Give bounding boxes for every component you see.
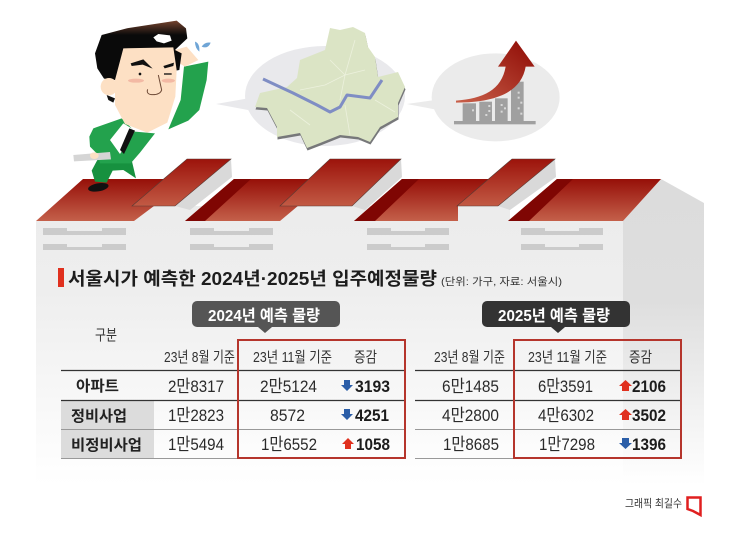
raised dormer roofs (132, 159, 555, 206)
legs (92, 160, 136, 183)
building illustration (36, 159, 704, 485)
row: redevelopment (71, 406, 389, 425)
credit (625, 497, 700, 515)
header 2025 pill: 2025년 예측 물량 (498, 307, 610, 325)
Han river (263, 79, 382, 112)
speech bubble: rising buildings (407, 41, 560, 141)
table: 2025 forecast (415, 301, 681, 458)
column headings: 23년 8월 기준 (434, 349, 505, 366)
row: non-redevelopment: 1058 (356, 435, 390, 454)
title marker (58, 268, 64, 287)
hair back (95, 21, 187, 80)
sweat drops (195, 42, 211, 52)
column headings (434, 349, 652, 366)
header 2024 pill: 2024년 예측 물량 (208, 307, 320, 325)
row label shading (61, 400, 154, 458)
icon: credit mark (688, 498, 700, 515)
highlight box 2024 (238, 340, 405, 458)
roof sections (36, 179, 661, 221)
map district lines (290, 40, 395, 135)
row: non-redevelopment: 비정비사업 (71, 437, 142, 454)
row: redevelopment: 8572 (270, 406, 305, 425)
face (115, 47, 177, 133)
building icons (454, 82, 536, 124)
building side wall (623, 179, 704, 485)
row: redevelopment: 3502 (632, 406, 666, 425)
header 2025 pill (482, 301, 630, 333)
ear (101, 78, 117, 95)
category heading: 구분 (95, 327, 117, 344)
title (58, 268, 562, 289)
map of Seoul (255, 27, 405, 148)
row: non-redevelopment: 1만7298 (539, 435, 595, 454)
row: apartments: 2106 (632, 377, 666, 396)
row: non-redevelopment: 1만5494 (168, 435, 224, 454)
row: apartments: 아파트 (76, 378, 119, 395)
raised arm (168, 62, 208, 129)
row: redevelopment: 정비사업 (71, 408, 127, 425)
credit: 그래픽 최길수 (625, 497, 682, 510)
row: redevelopment: 4만6302 (538, 406, 594, 425)
column headings: 증감 (354, 349, 377, 366)
row: redevelopment (442, 406, 666, 425)
row: redevelopment: 4251 (355, 406, 389, 425)
column headings: 23년 8월 기준 (164, 349, 235, 366)
shirt and tie (110, 123, 135, 154)
row: apartments: 3193 (355, 377, 390, 396)
row: non-redevelopment (71, 435, 390, 454)
shoe (87, 182, 109, 193)
column headings (164, 349, 377, 366)
blush (128, 79, 144, 83)
speech bubble: Seoul map (216, 27, 406, 150)
row: non-redevelopment: 1396 (632, 435, 666, 454)
nose (147, 75, 162, 95)
column headings: 증감 (629, 349, 652, 366)
window bars (43, 228, 603, 250)
title text: 서울시가 예측한 2024년·2025년 입주예정물량 (68, 269, 437, 289)
row: non-redevelopment (443, 435, 666, 454)
row: apartments: 2만5124 (260, 377, 317, 396)
rising arrow (456, 41, 535, 103)
jacket (89, 118, 155, 163)
row: non-redevelopment: 1만6552 (261, 435, 317, 454)
row: apartments: 2만8317 (168, 377, 224, 396)
row: apartments: 6만1485 (442, 377, 499, 396)
row: redevelopment: 1만2823 (168, 406, 224, 425)
rolled paper (73, 152, 111, 161)
character: man looking out (73, 21, 211, 193)
building front wall (36, 206, 623, 485)
building windows (472, 92, 522, 116)
unit note: (단위: 가구, 자료: 서울시) (441, 275, 562, 288)
header 2024 pill (192, 301, 340, 333)
dormer side walls (175, 159, 556, 210)
eyebrows and eyes (131, 59, 174, 69)
row: apartments: 6만3591 (538, 377, 593, 396)
column headings: 23년 11월 기준 (253, 349, 332, 366)
highlight box 2025 (514, 340, 681, 458)
row: apartments (442, 377, 666, 396)
map shadow (256, 30, 406, 150)
row: apartments (76, 377, 390, 396)
table: 2024 forecast (61, 301, 405, 458)
row: non-redevelopment: 1만8685 (443, 435, 499, 454)
row: redevelopment: 4만2800 (442, 406, 499, 425)
hair highlight (153, 34, 172, 43)
column headings: 23년 11월 기준 (528, 349, 607, 366)
